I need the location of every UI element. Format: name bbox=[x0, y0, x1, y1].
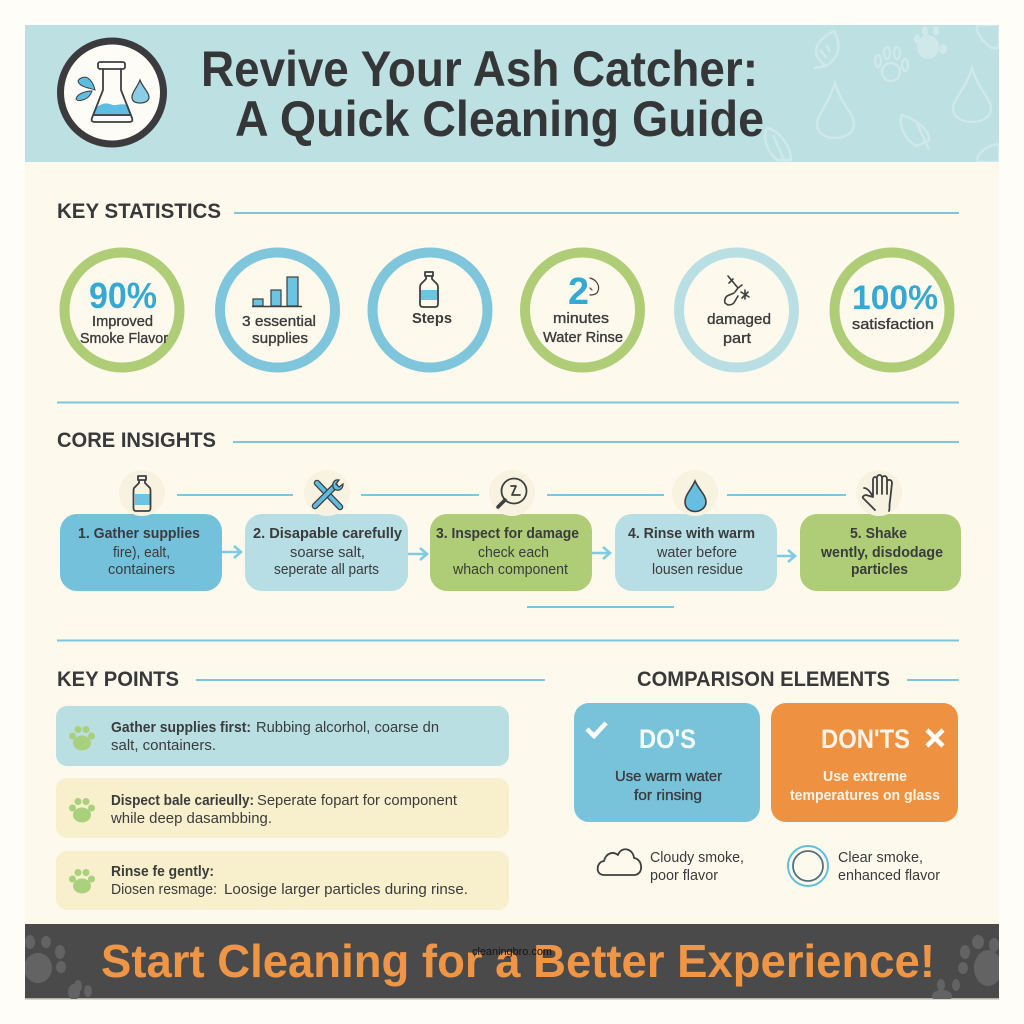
stat: 2 minutes water rinse: Water Rinse bbox=[543, 329, 623, 346]
clear smoke comparison: enhanced flavor bbox=[838, 867, 940, 884]
step 4: rinse with warm water bbox=[615, 470, 777, 591]
stat: 100% satisfaction: satisfaction bbox=[852, 316, 934, 333]
step 4: rinse with warm water: 4. Rinse with warm bbox=[628, 525, 755, 542]
key point 3: Loosige larger particles during rinse. bbox=[224, 881, 468, 898]
panel: don'ts: temperatures on glass bbox=[790, 787, 940, 804]
key point 3: Rinse fe gently: bbox=[111, 863, 214, 880]
footer banner bbox=[24, 924, 1002, 1002]
stat: 3 essential supplies: supplies bbox=[252, 330, 308, 347]
icon: cross bbox=[927, 730, 943, 746]
title: Revive Your Ash Catcher: bbox=[201, 41, 758, 97]
key point 2: while deep dasambbing. bbox=[110, 810, 272, 827]
key point 1: salt, containers. bbox=[111, 737, 216, 754]
panel: do's bbox=[574, 703, 760, 822]
key point 3: Diosen resmage: bbox=[111, 881, 217, 898]
step 3: inspect for damage bbox=[430, 470, 592, 591]
step 1: gather supplies: fire), ealt, bbox=[113, 544, 170, 561]
title bbox=[201, 41, 764, 147]
stat: 2 minutes water rinse: 2 bbox=[568, 271, 589, 313]
icon: magnifier with clock bbox=[498, 478, 526, 507]
footer banner: Start Cleaning for a Better Experience! bbox=[101, 935, 935, 987]
stat: 90% improved smoke flavor bbox=[64, 252, 180, 368]
panel: don'ts: Use extreme bbox=[823, 768, 907, 785]
icon: bottle bbox=[134, 476, 150, 511]
stat: steps bbox=[372, 252, 488, 368]
stat: damaged part bbox=[679, 252, 794, 368]
step 5: shake gently: wently, disdodage bbox=[820, 544, 943, 561]
stat: 90% improved smoke flavor: 90% bbox=[89, 275, 157, 316]
title: A Quick Cleaning Guide bbox=[235, 91, 764, 147]
stat: 2 minutes water rinse: minutes bbox=[553, 310, 609, 327]
key point 3 bbox=[56, 851, 509, 910]
icon: paw bbox=[69, 798, 95, 822]
header background pattern bbox=[765, 25, 999, 162]
panel: do's: Use warm water bbox=[615, 768, 722, 785]
key point 1 bbox=[56, 706, 509, 766]
logo icon: flask with water drops bbox=[60, 41, 164, 144]
header banner bbox=[25, 25, 999, 162]
step 5: shake gently: particles bbox=[851, 561, 908, 578]
step 1: gather supplies: containers bbox=[108, 561, 175, 578]
arrow bbox=[592, 547, 610, 559]
arrow bbox=[777, 550, 795, 562]
step 2: disassemble carefully: soarse salt, bbox=[290, 544, 365, 561]
step 2: disassemble carefully: 2. Disapable carefully bbox=[253, 525, 403, 542]
step 2: disassemble carefully: seperate all parts bbox=[274, 561, 379, 578]
step 1: gather supplies: 1. Gather supplies bbox=[78, 525, 200, 542]
stat: steps: Steps bbox=[412, 310, 452, 327]
stat: 90% improved smoke flavor: Improved bbox=[92, 313, 153, 330]
step 5: shake gently bbox=[800, 470, 961, 591]
clear smoke comparison: Clear smoke, bbox=[838, 849, 923, 866]
icon: paw bbox=[69, 726, 95, 750]
icon: cloud bbox=[598, 849, 641, 875]
heading: key statistics: KEY STATISTICS bbox=[57, 200, 221, 223]
key point 2: Seperate fopart for component bbox=[257, 792, 458, 809]
stat: 3 essential supplies: 3 essential bbox=[242, 313, 316, 330]
step 3: inspect for damage: 3. Inspect for damage bbox=[436, 525, 579, 542]
stat: 100% satisfaction bbox=[834, 252, 950, 368]
heading: core insights: CORE INSIGHTS bbox=[57, 429, 216, 452]
icon: broken part bbox=[725, 276, 749, 305]
heading: key points: KEY POINTS bbox=[57, 668, 179, 691]
key point 2 bbox=[56, 778, 509, 838]
icon: crossed tools bbox=[315, 480, 343, 507]
clear smoke comparison bbox=[788, 846, 940, 886]
panel: don'ts bbox=[771, 703, 958, 822]
stat: damaged part: part bbox=[723, 330, 752, 347]
panel: do's: DO'S bbox=[639, 724, 696, 754]
cloudy smoke comparison bbox=[598, 849, 744, 884]
icon: bar chart bbox=[252, 277, 302, 306]
stat: damaged part: damaged bbox=[707, 311, 771, 328]
footer paw pattern bbox=[24, 935, 1002, 1002]
step 2: disassemble carefully bbox=[245, 470, 408, 591]
stat: 100% satisfaction: 100% bbox=[852, 279, 938, 317]
icon: bottle bbox=[420, 272, 438, 307]
icon: hand bbox=[863, 475, 892, 511]
step 3: inspect for damage: whach component bbox=[452, 561, 569, 578]
step 4: rinse with warm water: lousen residue bbox=[652, 561, 743, 578]
step 3: inspect for damage: check each bbox=[478, 544, 549, 561]
arrow bbox=[408, 548, 427, 560]
key point 1: Gather supplies first: bbox=[111, 719, 251, 736]
icon: water drop bbox=[685, 481, 706, 512]
cloudy smoke comparison: Cloudy smoke, bbox=[650, 849, 744, 866]
key point 1: Rubbing alcorhol, coarse dn bbox=[256, 719, 439, 736]
panel: don'ts: DON'TS bbox=[821, 724, 910, 754]
icon: clear ring bbox=[788, 846, 828, 886]
watermark: cleaningbro.com bbox=[472, 946, 552, 958]
panel: do's: for rinsing bbox=[634, 787, 702, 804]
arrow bbox=[222, 546, 241, 558]
icon: check mark bbox=[587, 723, 606, 736]
step 4: rinse with warm water: water before bbox=[656, 544, 737, 561]
step 5: shake gently: 5. Shake bbox=[850, 525, 907, 542]
cloudy smoke comparison: poor flavor bbox=[650, 867, 718, 884]
stat: 3 essential supplies bbox=[220, 252, 335, 368]
icon: paw bbox=[69, 869, 95, 894]
stat: 2 minutes water rinse bbox=[525, 252, 640, 368]
stat: 90% improved smoke flavor: Smoke Flavor bbox=[80, 330, 168, 347]
key point 2: Dispect bale carieully: bbox=[111, 792, 254, 809]
step 1: gather supplies bbox=[60, 470, 222, 591]
heading: comparison elements: COMPARISON ELEMENTS bbox=[637, 668, 890, 691]
